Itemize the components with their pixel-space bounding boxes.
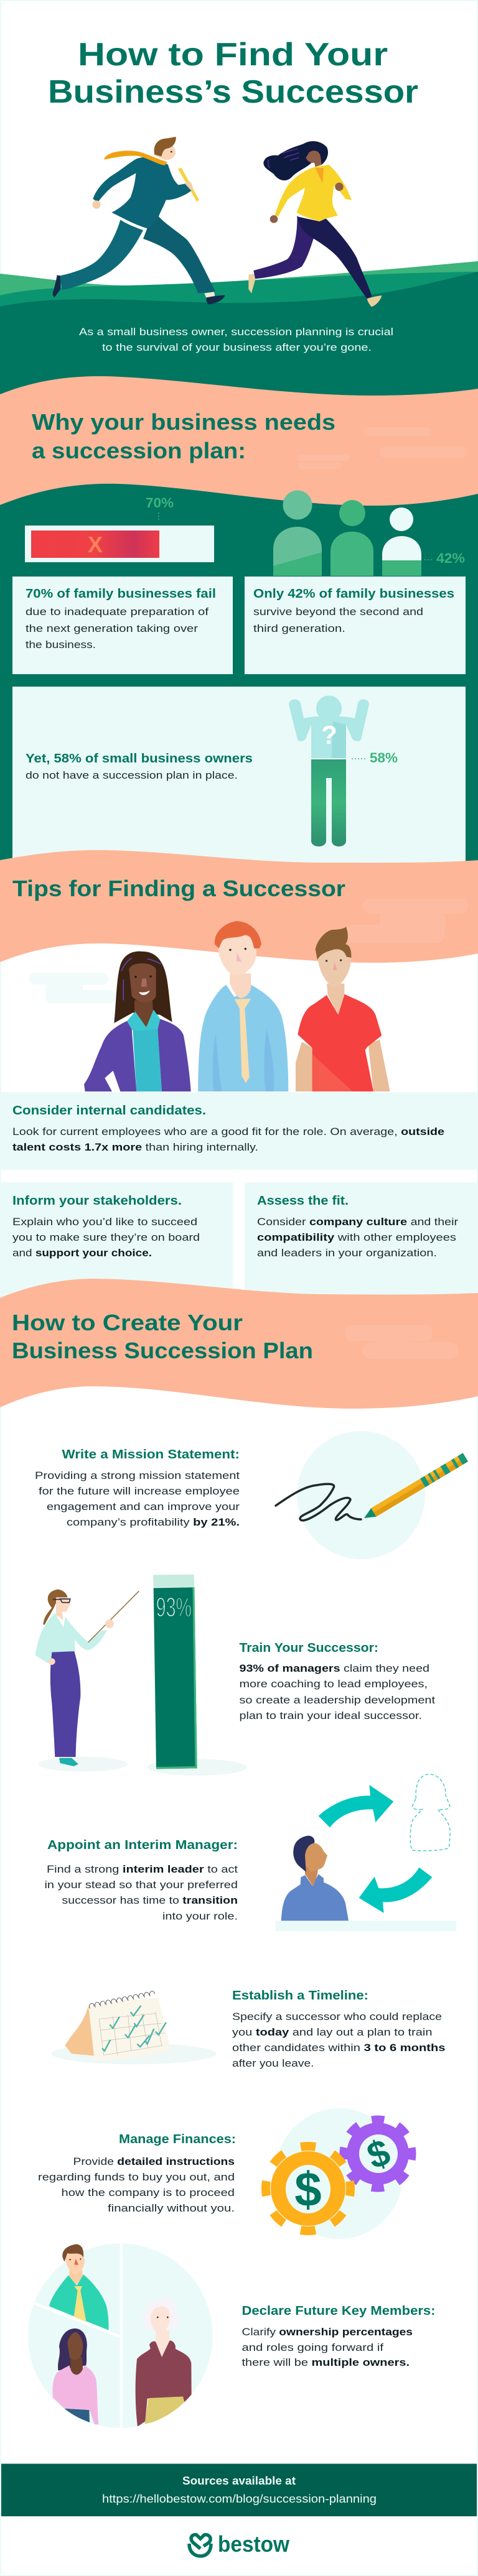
card: consider internal candidates: Consider internal candidates. — [12, 1104, 206, 1118]
peach band: why section header — [0, 376, 478, 516]
card: consider internal candidates: Look for current employees who are a good fit for the role. On average, outside — [12, 1126, 444, 1137]
illustration: future key members — [28, 2239, 213, 2432]
card: 58% have no plan: Yet, 58% of small business owners — [26, 752, 253, 766]
illustration: teacher at blackboard — [35, 1575, 247, 1776]
card: consider internal candidates: talent costs 1.7x more than hiring internally. — [12, 1141, 258, 1153]
step: train your successor — [239, 1641, 435, 1721]
step: establish a timeline: Establish a Timeline: — [232, 1989, 368, 2003]
step: manage finances: Provide detailed instructions — [73, 2156, 235, 2167]
manager figure — [281, 1836, 349, 1920]
step: declare future key members: Clarify ownership percentages — [241, 2326, 413, 2338]
step: write a mission statement: engagement and can improve your — [47, 1501, 240, 1513]
illustration: running woman — [248, 141, 382, 307]
woman in purple jacket — [84, 952, 191, 1091]
logo: bestow: bestow — [218, 2531, 290, 2557]
chart: 42% people: 42% — [436, 550, 465, 566]
step: manage finances: how the company is to proceed — [61, 2187, 235, 2198]
right member — [136, 2298, 192, 2427]
step: appoint an interim manager: Appoint an Interim Manager: — [47, 1838, 238, 1852]
step: write a mission statement: Providing a strong mission statement — [35, 1470, 240, 1481]
step: appoint an interim manager: in your stead so that your preferred — [45, 1879, 238, 1891]
man in blue shirt — [198, 921, 288, 1091]
purple gear — [344, 2120, 412, 2188]
chart: 70% bar: X — [88, 532, 103, 557]
title: How to Find Your — [78, 37, 388, 73]
illustration: interim manager and arrows — [276, 1774, 456, 1931]
card: inform your stakeholders: Explain who you’d like to succeed — [12, 1216, 197, 1228]
blackboard with 93% — [153, 1575, 197, 1769]
card: assess the fit: and leaders in your organization. — [257, 1247, 437, 1259]
step: manage finances: regarding funds to buy you out, and — [38, 2171, 235, 2183]
heading: how to create your business succession plan: Business Succession Plan — [12, 1338, 313, 1363]
chart: 42% people — [273, 490, 465, 576]
illustration: running man with baton — [52, 137, 225, 304]
step: establish a timeline: after you leave. — [232, 2057, 314, 2069]
card: inform your stakeholders: Inform your stakeholders. — [12, 1194, 182, 1208]
step: declare future key members — [241, 2304, 436, 2368]
card: only 42% survive — [245, 577, 466, 674]
step: declare future key members: there will be multiple owners. — [241, 2356, 410, 2368]
chart: 70% bar: 70% — [146, 495, 174, 511]
orange gear — [266, 2146, 350, 2231]
top-left member — [49, 2244, 109, 2330]
card: 70% of family businesses fail — [12, 577, 233, 674]
illustration: calendar — [52, 1991, 217, 2064]
step: train your successor: more coaching to lead employees, — [239, 1678, 428, 1690]
heading: why your business needs a succession plan: Why your business needs — [32, 409, 335, 435]
footer: sources — [1, 2464, 477, 2516]
illustration: money gears — [266, 2108, 412, 2239]
arrow: to successor — [319, 1785, 393, 1827]
heading: how to create your business succession plan — [12, 1310, 313, 1363]
arrow: back to manager — [359, 1868, 432, 1913]
card: 70% of family businesses fail: the next generation taking over — [26, 623, 198, 634]
chart: 58% person figure: 58% — [370, 750, 398, 766]
title: Business’s Successor — [48, 74, 418, 110]
step: appoint an interim manager: Find a strong interim leader to act — [47, 1863, 238, 1875]
dashed successor silhouette — [410, 1774, 450, 1851]
step: appoint an interim manager: successor has time to transition — [62, 1894, 238, 1906]
step: manage finances — [38, 2133, 236, 2214]
step: train your successor: so create a leadership development — [239, 1694, 435, 1706]
title — [48, 37, 418, 110]
step: establish a timeline: Specify a successor who could replace — [232, 2011, 442, 2022]
card: assess the fit: compatibility with other employees — [257, 1231, 456, 1243]
bottom-left member — [52, 2328, 98, 2424]
heading: tips for finding a successor: Tips for Finding a Successor — [12, 876, 345, 901]
card: 70% of family businesses fail: due to inadequate preparation of — [26, 606, 209, 618]
card: inform your stakeholders — [1, 1182, 233, 1300]
step: write a mission statement: for the future will increase employee — [39, 1485, 240, 1497]
step: establish a timeline: you today and lay out a plan to train — [232, 2026, 432, 2038]
card: inform your stakeholders: you to make sure they’re on board — [12, 1231, 200, 1243]
step: declare future key members: and roles going forward if — [241, 2342, 383, 2353]
card: 58% have no plan: do not have a succession plan in place. — [26, 769, 238, 781]
card: only 42% survive: survive beyond the second and — [253, 606, 423, 618]
card: 70% of family businesses fail: the business. — [26, 639, 96, 651]
step: appoint an interim manager — [45, 1838, 238, 1922]
decorative cloud — [29, 973, 116, 1003]
intro text — [79, 326, 393, 353]
green hills — [0, 261, 478, 410]
step: write a mission statement: company’s profitability by 21%. — [67, 1516, 240, 1528]
intro text: to the survival of your business after you’re gone. — [102, 341, 372, 353]
step: train your successor: Train Your Successor: — [239, 1641, 378, 1655]
card: assess the fit: Consider company culture and their — [257, 1216, 458, 1228]
step: appoint an interim manager: into your role. — [162, 1911, 238, 1922]
card: 70% of family businesses fail: 70% of family businesses fail — [26, 587, 216, 601]
step: write a mission statement: Write a Mission Statement: — [62, 1448, 240, 1462]
step: manage finances: Manage Finances: — [119, 2133, 236, 2146]
orange gear: $ — [294, 2162, 322, 2217]
blackboard with 93%: 93% — [156, 1593, 192, 1623]
heading: how to create your business succession plan: How to Create Your — [12, 1310, 243, 1335]
step: train your successor: plan to train your ideal successor. — [239, 1710, 422, 1721]
man in red polo — [296, 927, 390, 1091]
step: write a mission statement — [35, 1448, 240, 1528]
chart: 58% person figure: ? — [321, 720, 337, 749]
card: only 42% survive: third generation. — [253, 623, 345, 634]
intro text: As a small business owner, succession planning is crucial — [79, 326, 393, 338]
step: manage finances: financially without you. — [108, 2202, 235, 2214]
card: assess the fit: Assess the fit. — [257, 1194, 349, 1208]
heading: why your business needs a succession plan: a succession plan: — [32, 438, 246, 463]
card: inform your stakeholders: and support your choice. — [12, 1247, 152, 1259]
step: declare future key members: Declare Future Key Members: — [241, 2304, 436, 2318]
footer: sources: Sources available at — [182, 2475, 296, 2487]
logo: bestow — [189, 2531, 290, 2557]
peach band: tips section header — [0, 850, 478, 963]
chart: 70% bar — [25, 495, 214, 562]
card: 58% have no plan — [12, 687, 466, 867]
footer: sources: https://hellobestow.com/blog/succession-planning — [102, 2493, 377, 2505]
card: assess the fit — [245, 1182, 477, 1300]
dark green stats panel — [0, 484, 478, 871]
illustration: three candidates — [84, 921, 390, 1091]
peach band: plan section header — [0, 1279, 478, 1409]
purple gear: $ — [362, 2131, 395, 2177]
heading: why your business needs a succession plan — [32, 409, 335, 463]
illustration: pencil and signature — [276, 1431, 468, 1559]
step: establish a timeline: other candidates within 3 to 6 months — [232, 2042, 446, 2054]
chart: 58% person figure — [289, 695, 398, 846]
step: establish a timeline — [232, 1989, 446, 2069]
card: only 42% survive: Only 42% of family businesses — [253, 587, 454, 601]
step: train your successor: 93% of managers claim they need — [239, 1662, 429, 1674]
card: consider internal candidates — [1, 1092, 477, 1170]
